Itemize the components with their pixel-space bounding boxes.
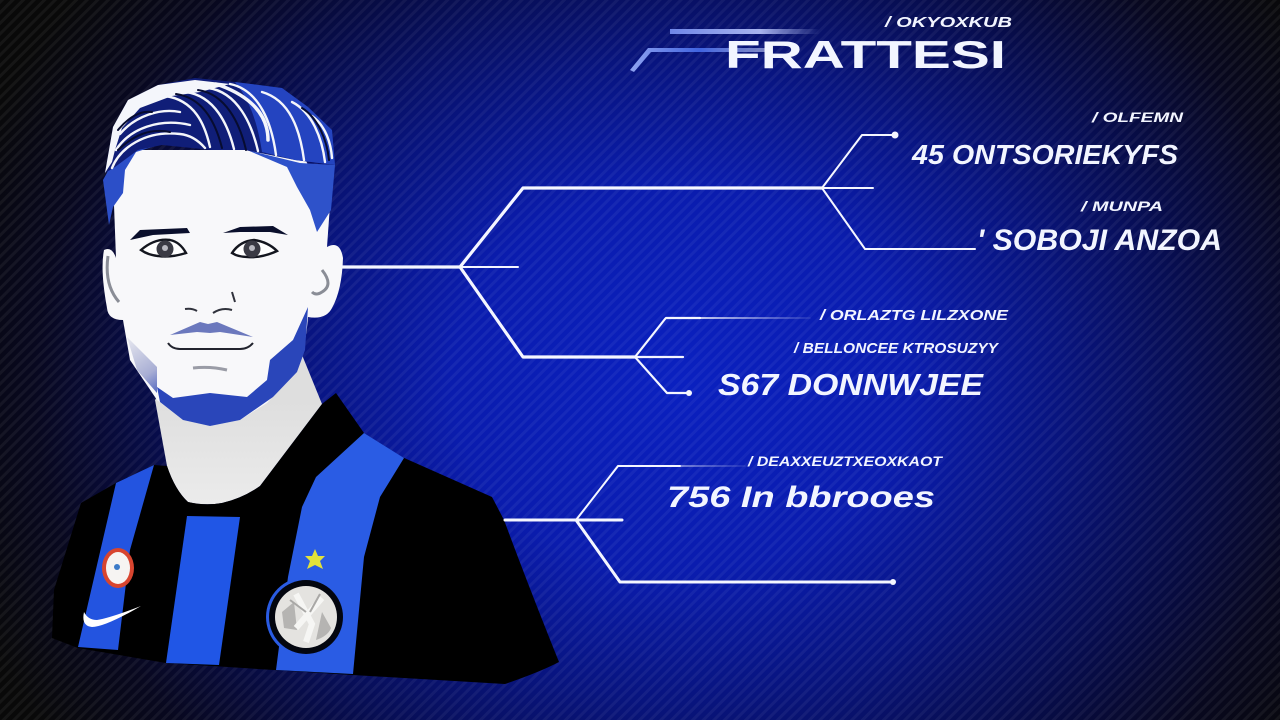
- eye right: [232, 240, 277, 258]
- stat: lower branch: [667, 453, 944, 514]
- icon: yellow star: [305, 549, 325, 569]
- head: [103, 78, 343, 426]
- stat label two: / BELLONCEE KTROSUZYY: [793, 340, 1000, 357]
- moustache: [170, 322, 253, 337]
- stat: middle branch: [718, 307, 1009, 402]
- lower branch upper arm: [576, 466, 680, 520]
- title speed line upper: [670, 29, 820, 34]
- stat: top branch upper: [911, 109, 1184, 170]
- icon: club crest: [266, 577, 346, 657]
- icon: round tricolour patch: [102, 548, 134, 588]
- stat value: 45 ONTSORIEKYFS: [911, 139, 1178, 170]
- beard: [157, 307, 308, 426]
- title block: [630, 14, 1012, 77]
- middle branch: [635, 318, 700, 393]
- lower lip: [193, 367, 227, 370]
- icon: swoosh logo: [83, 606, 141, 627]
- stat value: 756 In bbrooes: [667, 481, 935, 514]
- neck: [155, 350, 322, 504]
- jersey black body: [52, 393, 559, 684]
- stat value: S67 DONNWJEE: [718, 367, 984, 402]
- title: FRATTESI: [725, 34, 1006, 77]
- hair blue temple right: [247, 150, 335, 232]
- hair blue temple left: [103, 144, 162, 225]
- stat label: / MUNPA: [1080, 198, 1163, 214]
- lower branch fading line: [680, 465, 745, 467]
- middle branch fading line: [700, 317, 810, 319]
- jersey: [52, 393, 559, 684]
- stat value: ' SOBOJI ANZOA: [977, 224, 1222, 257]
- title kicker: / OKYOXKUB: [884, 14, 1012, 31]
- cheek stubble: [127, 337, 157, 393]
- ear shadows: [107, 256, 328, 302]
- main connector stub: [460, 266, 518, 268]
- main connector from head: [342, 188, 822, 357]
- jersey left blue stripe: [78, 465, 154, 650]
- eyebrow right: [223, 226, 288, 235]
- nose: [185, 292, 235, 313]
- lower branch: [505, 520, 893, 582]
- face and ears: [103, 150, 343, 426]
- connector end dots: [686, 132, 898, 585]
- title speed line lower: [630, 48, 770, 72]
- mouth: [168, 343, 253, 349]
- stat label: / DEAXXEUZTXEOXKAOT: [747, 453, 944, 469]
- stat: top branch lower: [977, 198, 1222, 257]
- stat label one: / ORLAZTG LILZXONE: [819, 307, 1009, 324]
- eye left: [141, 240, 186, 258]
- jersey centre blue stripe: [166, 516, 240, 665]
- eyebrow left: [130, 228, 190, 240]
- jersey right blue stripe: [276, 433, 404, 674]
- hair strands: [112, 84, 332, 168]
- hair left white mass: [105, 80, 230, 173]
- hair right blue mass: [235, 82, 335, 165]
- stat label: / OLFEMN: [1091, 109, 1184, 125]
- hair top: [105, 78, 335, 173]
- portrait: player illustration: [52, 78, 559, 684]
- top branch: [822, 135, 975, 249]
- connector lines from player to stats: [342, 132, 975, 585]
